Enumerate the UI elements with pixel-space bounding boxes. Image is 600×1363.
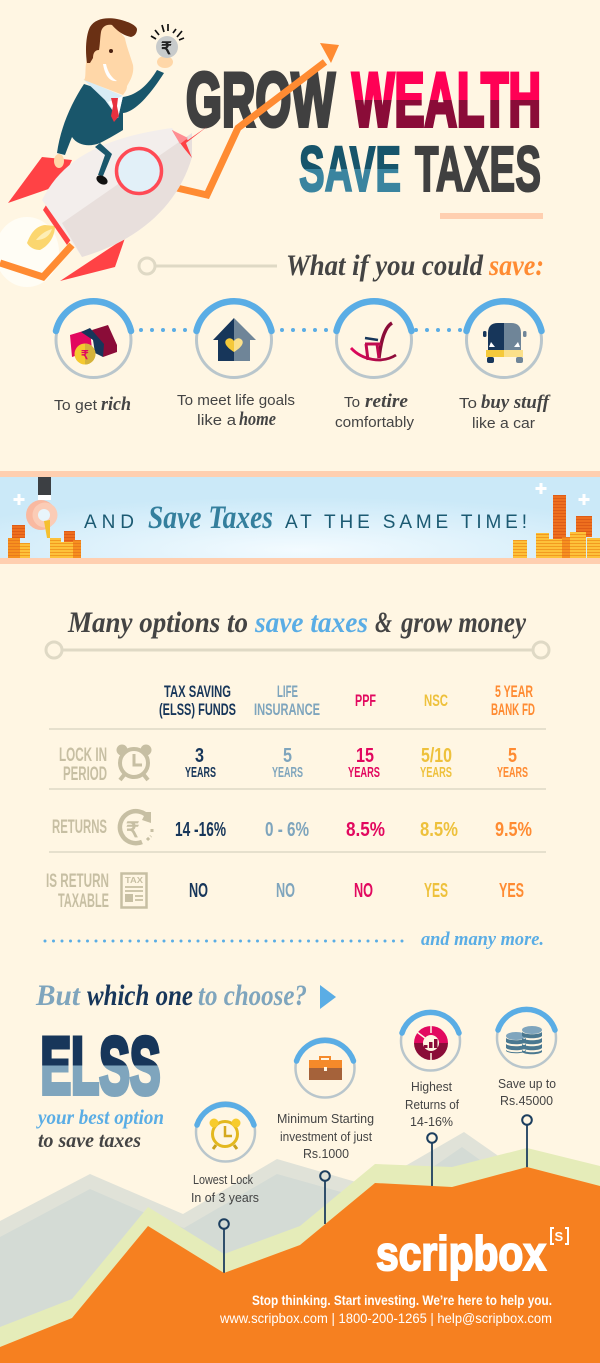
table header: (ELSS) FUNDS — [159, 701, 236, 719]
feature: lowest lock in — [191, 1102, 259, 1273]
footer contact text — [219, 1293, 552, 1326]
icon: alarm clock — [116, 744, 152, 780]
feature: highest returns: Returns of — [405, 1098, 459, 1112]
banner: and save taxes at the same time: AND — [84, 512, 134, 533]
heading: many options to save taxes and grow money: grow money — [400, 606, 527, 639]
logo: scripbox: scripbox — [376, 1228, 546, 1281]
row: lock in period: 5 — [283, 745, 292, 767]
row: is return taxable — [46, 871, 524, 912]
and many more note: and many more. — [421, 929, 544, 950]
icon: rocking chair — [351, 323, 396, 360]
row: returns — [52, 811, 532, 843]
comparison table — [46, 683, 546, 912]
icon: businessman — [54, 18, 184, 186]
row: lock in period — [59, 744, 528, 785]
goal: life goals like a home: home — [239, 409, 276, 430]
feature: save up to — [497, 1008, 556, 1168]
goal: retire comfortably: comfortably — [335, 414, 415, 431]
icon: left coin stacks — [8, 525, 81, 558]
logo: scripbox: S — [554, 1229, 564, 1244]
feature: lowest lock in: In of 3 years — [191, 1191, 259, 1205]
heading: many options to save taxes and grow money: & — [375, 606, 392, 639]
banner: and save taxes at the same time: AT THE SAME TIME! — [285, 512, 527, 533]
icon: yellow alarm clock — [210, 1118, 240, 1149]
hero illustration: growth arrow, businessman on rocket — [0, 18, 339, 287]
goal: to get rich: rich — [101, 394, 131, 415]
green hill band — [0, 1148, 600, 1363]
row: is return taxable: YES — [424, 880, 448, 902]
ELSS your best option: your best option — [35, 1105, 164, 1129]
heading: but which one to choose — [35, 979, 336, 1012]
row: lock in period: YEARS — [420, 765, 452, 781]
row: is return taxable: IS RETURN — [46, 871, 109, 892]
mountains — [0, 1132, 600, 1363]
heading: many options to save taxes and grow money — [46, 606, 549, 658]
feature: minimum starting investment: Rs.1000 — [303, 1147, 349, 1161]
goal: life goals like a home: like a — [197, 412, 237, 429]
ELSS your best option: to save taxes — [38, 1128, 141, 1152]
row: is return taxable: YES — [499, 880, 524, 902]
banner: and save taxes at the same time — [0, 471, 600, 564]
goal: buy stuff like a car: buy stuff — [481, 392, 551, 413]
heading: what if you could save — [139, 249, 544, 282]
row: lock in period: 5/10 — [421, 745, 452, 767]
row: is return taxable: NO — [276, 880, 295, 902]
row: returns: 0 - 6% — [265, 819, 309, 841]
icon: briefcase — [309, 1057, 342, 1080]
icon: rupee coin — [151, 24, 184, 58]
feature: save up to: Save up to — [498, 1077, 556, 1091]
pin — [522, 1115, 532, 1168]
row: lock in period: PERIOD — [63, 764, 107, 785]
row: is return taxable: NO — [354, 880, 373, 902]
heading: many options to save taxes and grow money: Many options to — [67, 606, 248, 639]
feature: highest returns: Highest — [411, 1080, 453, 1094]
row: returns: RETURNS — [52, 817, 107, 838]
dotted connectors — [139, 328, 462, 332]
row: lock in period: 5 — [508, 745, 517, 767]
row: is return taxable: TAXABLE — [58, 891, 109, 912]
row: returns: 8.5% — [346, 819, 385, 841]
table header: LIFE — [277, 683, 298, 701]
icon: growth arrow — [177, 43, 339, 195]
table header: NSC — [424, 692, 448, 710]
feature: highest returns: 14-16% — [410, 1115, 453, 1129]
ELSS your best option — [35, 1022, 164, 1152]
title — [186, 58, 543, 219]
ELSS your best option: ELSS — [40, 1022, 160, 1112]
feature: lowest lock in: Lowest Lock — [193, 1173, 254, 1187]
table header: INSURANCE — [254, 701, 320, 719]
heading: but which one to choose: to choose? — [198, 979, 307, 1012]
row: lock in period: LOCK IN — [59, 745, 107, 766]
goal: retire comfortably: retire — [365, 391, 409, 412]
heading: but which one to choose: which one — [87, 979, 193, 1012]
row: lock in period: YEARS — [348, 765, 380, 781]
row: lock in period: YEARS — [272, 765, 303, 781]
row: returns: 14 -16% — [175, 819, 226, 841]
icon: van — [483, 323, 526, 363]
heading: but which one to choose: But — [35, 979, 82, 1012]
goal: buy stuff like a car: like a car — [472, 415, 535, 432]
goal: buy stuff like a car — [459, 301, 551, 432]
feature: highest returns — [401, 1012, 460, 1187]
icon: right coin stacks — [513, 495, 600, 558]
row: returns: 9.5% — [495, 819, 532, 841]
icon: rocket — [8, 126, 208, 281]
pin — [320, 1171, 330, 1224]
row: is return taxable: NO — [189, 880, 208, 902]
goal: to get rich — [54, 301, 131, 415]
feature: minimum starting investment: Minimum Starting — [277, 1112, 374, 1126]
banner: and save taxes at the same time: Save Taxes — [148, 500, 273, 536]
icon: rocket flame — [0, 217, 72, 287]
icon: house with heart — [213, 318, 256, 361]
footer contact text: www.scripbox.com | 1800-200-1265 | help@scripbox.com — [219, 1311, 552, 1326]
feature: minimum starting investment: investment of just — [280, 1130, 372, 1144]
row: lock in period: 15 — [356, 745, 374, 767]
feature: save up to: Rs.45000 — [500, 1094, 553, 1108]
goal: life goals like a home — [177, 301, 295, 430]
heading: many options to save taxes and grow money: save taxes — [254, 606, 368, 639]
icon: tax document — [122, 874, 146, 908]
table header: 5 YEAR — [495, 683, 533, 701]
icon: donut chart with bars — [414, 1025, 448, 1061]
icon: money bundles and coin: ₹ — [81, 348, 89, 362]
icon: rupee coin: ₹ — [161, 39, 172, 58]
table header — [159, 683, 535, 719]
icon: hand dropping coin — [26, 477, 58, 538]
feature: minimum starting investment — [277, 1038, 374, 1224]
footer contact text: Stop thinking. Start investing. We’re here to help you. — [252, 1293, 552, 1308]
goal: life goals like a home: To meet life goals — [177, 392, 295, 409]
heading: what if you could save: save: — [488, 249, 544, 282]
goal: retire comfortably: To — [344, 394, 360, 411]
orange footer hill — [0, 1167, 600, 1363]
icon: sparkles — [14, 483, 590, 505]
heading: what if you could save: What if you could — [286, 249, 484, 282]
table header: TAX SAVING — [164, 683, 231, 701]
goal: retire comfortably — [335, 301, 415, 431]
icon: coin stacks — [506, 1026, 542, 1054]
row: lock in period: 3 — [195, 745, 204, 767]
title: GROW — [186, 58, 335, 143]
row: lock in period: YEARS — [497, 765, 528, 781]
icon: tax document: TAX — [125, 876, 144, 885]
title: SAVE — [299, 133, 401, 205]
goal: to get rich: To get — [54, 397, 98, 414]
row: lock in period: YEARS — [185, 765, 216, 781]
icon: rupee refresh — [120, 811, 152, 843]
icon: rupee refresh: ₹ — [126, 819, 139, 842]
goal: buy stuff like a car: To — [459, 395, 477, 412]
pin — [219, 1219, 229, 1273]
pin — [427, 1133, 437, 1187]
table header: PPF — [355, 692, 376, 710]
row: returns: 8.5% — [420, 819, 458, 841]
table header: BANK FD — [491, 701, 535, 719]
